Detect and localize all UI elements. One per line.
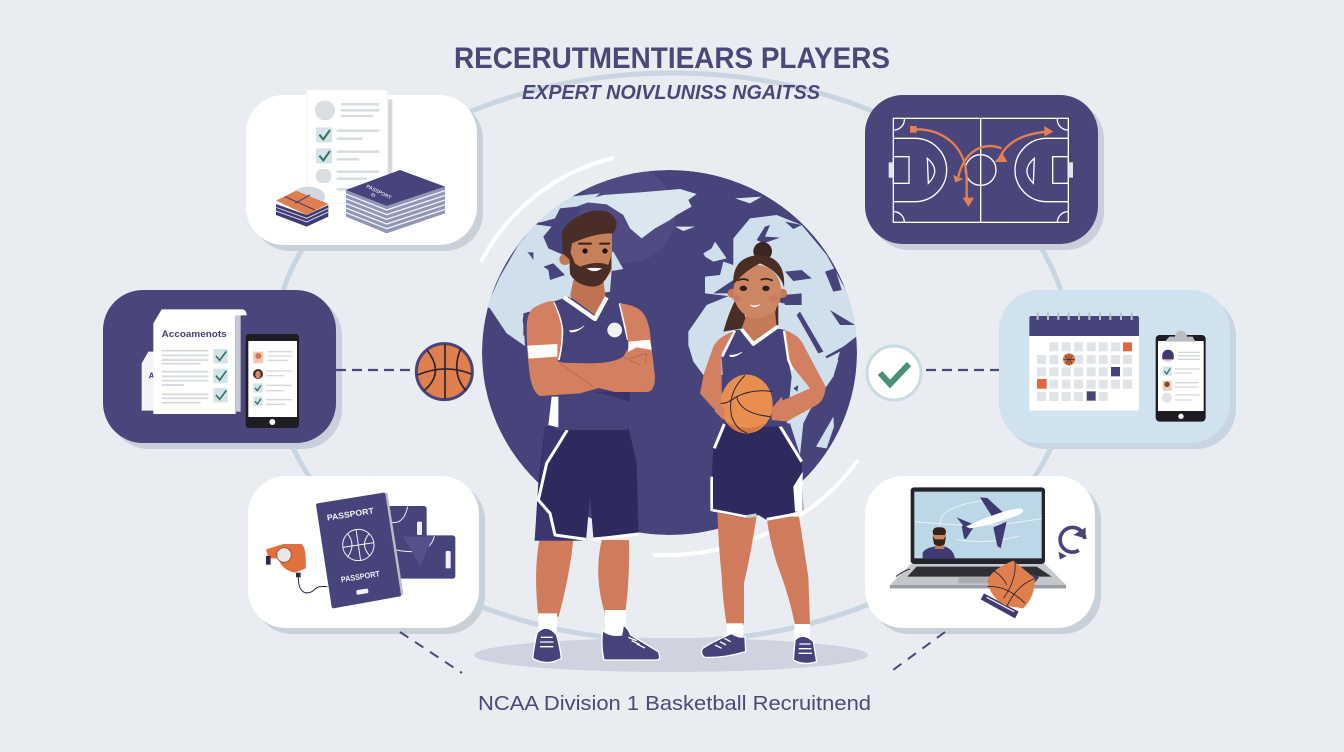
male head xyxy=(559,210,617,287)
passport xyxy=(316,493,403,608)
checklist paper xyxy=(307,90,392,203)
ground shadow xyxy=(474,638,868,672)
panel: passport and whistle xyxy=(248,476,485,634)
icon: basketball badge xyxy=(416,344,472,400)
play arrows xyxy=(910,126,1053,207)
Americas and Greenland xyxy=(487,189,697,346)
female hair back xyxy=(723,298,778,332)
title: RECERUTMENTIEARS PLAYERS xyxy=(454,42,890,75)
connector: right dashed line xyxy=(926,369,999,371)
laptop xyxy=(890,487,1066,588)
stack of passports xyxy=(346,170,445,233)
passport: PASSPORT xyxy=(340,569,381,584)
connector: lower left dashes xyxy=(400,632,462,673)
panel: court play diagram xyxy=(865,95,1104,250)
basketball on laptop xyxy=(981,561,1039,618)
player: female xyxy=(700,242,826,663)
court lines xyxy=(889,118,1073,222)
stack of orange bundles xyxy=(276,187,328,227)
stack of passports: ID xyxy=(370,192,376,198)
video call coach xyxy=(923,527,955,558)
globe orbit arcs xyxy=(481,158,858,555)
globe xyxy=(482,167,858,535)
connector: lower right dashes xyxy=(893,632,945,670)
female shoes xyxy=(701,633,817,663)
male shoes xyxy=(533,625,660,662)
whistle xyxy=(266,544,327,593)
airplane xyxy=(957,497,1023,548)
panel: laptop with flight xyxy=(865,476,1101,634)
calendar xyxy=(1029,313,1139,411)
purple travel cards xyxy=(367,506,455,579)
icon: refresh xyxy=(1058,527,1086,559)
clipboard phone xyxy=(1156,331,1206,422)
icon: check badge xyxy=(867,346,921,400)
player: male xyxy=(523,210,660,662)
male torso and arms xyxy=(523,280,655,430)
stack of passports: PASSPORT xyxy=(365,184,392,201)
male legs xyxy=(536,540,629,635)
panel: calendar and clipboard xyxy=(999,290,1236,449)
connector: left dashed line xyxy=(336,369,410,371)
female legs xyxy=(717,512,810,639)
East Africa and Madagascar xyxy=(787,360,838,455)
smartphone xyxy=(246,334,299,428)
male shorts xyxy=(535,427,639,541)
basketball held xyxy=(713,375,788,433)
female head xyxy=(728,242,787,318)
footer caption: NCAA Division 1 Basketball Recruitnend xyxy=(478,693,871,715)
assessment sheets xyxy=(142,309,247,414)
female torso and arms xyxy=(700,310,826,427)
passport: PASSPORT xyxy=(326,505,374,523)
subtitle: EXPERT NOIVLUNISS NGAITSS xyxy=(522,82,821,104)
assessment sheets: A xyxy=(149,372,155,381)
panel: documents and passports xyxy=(246,90,483,251)
panel: assessments and phone xyxy=(103,290,342,449)
Europe, Asia and Africa xyxy=(675,197,858,375)
female shorts xyxy=(712,423,803,520)
assessment sheets: Accoamenots xyxy=(162,329,227,339)
